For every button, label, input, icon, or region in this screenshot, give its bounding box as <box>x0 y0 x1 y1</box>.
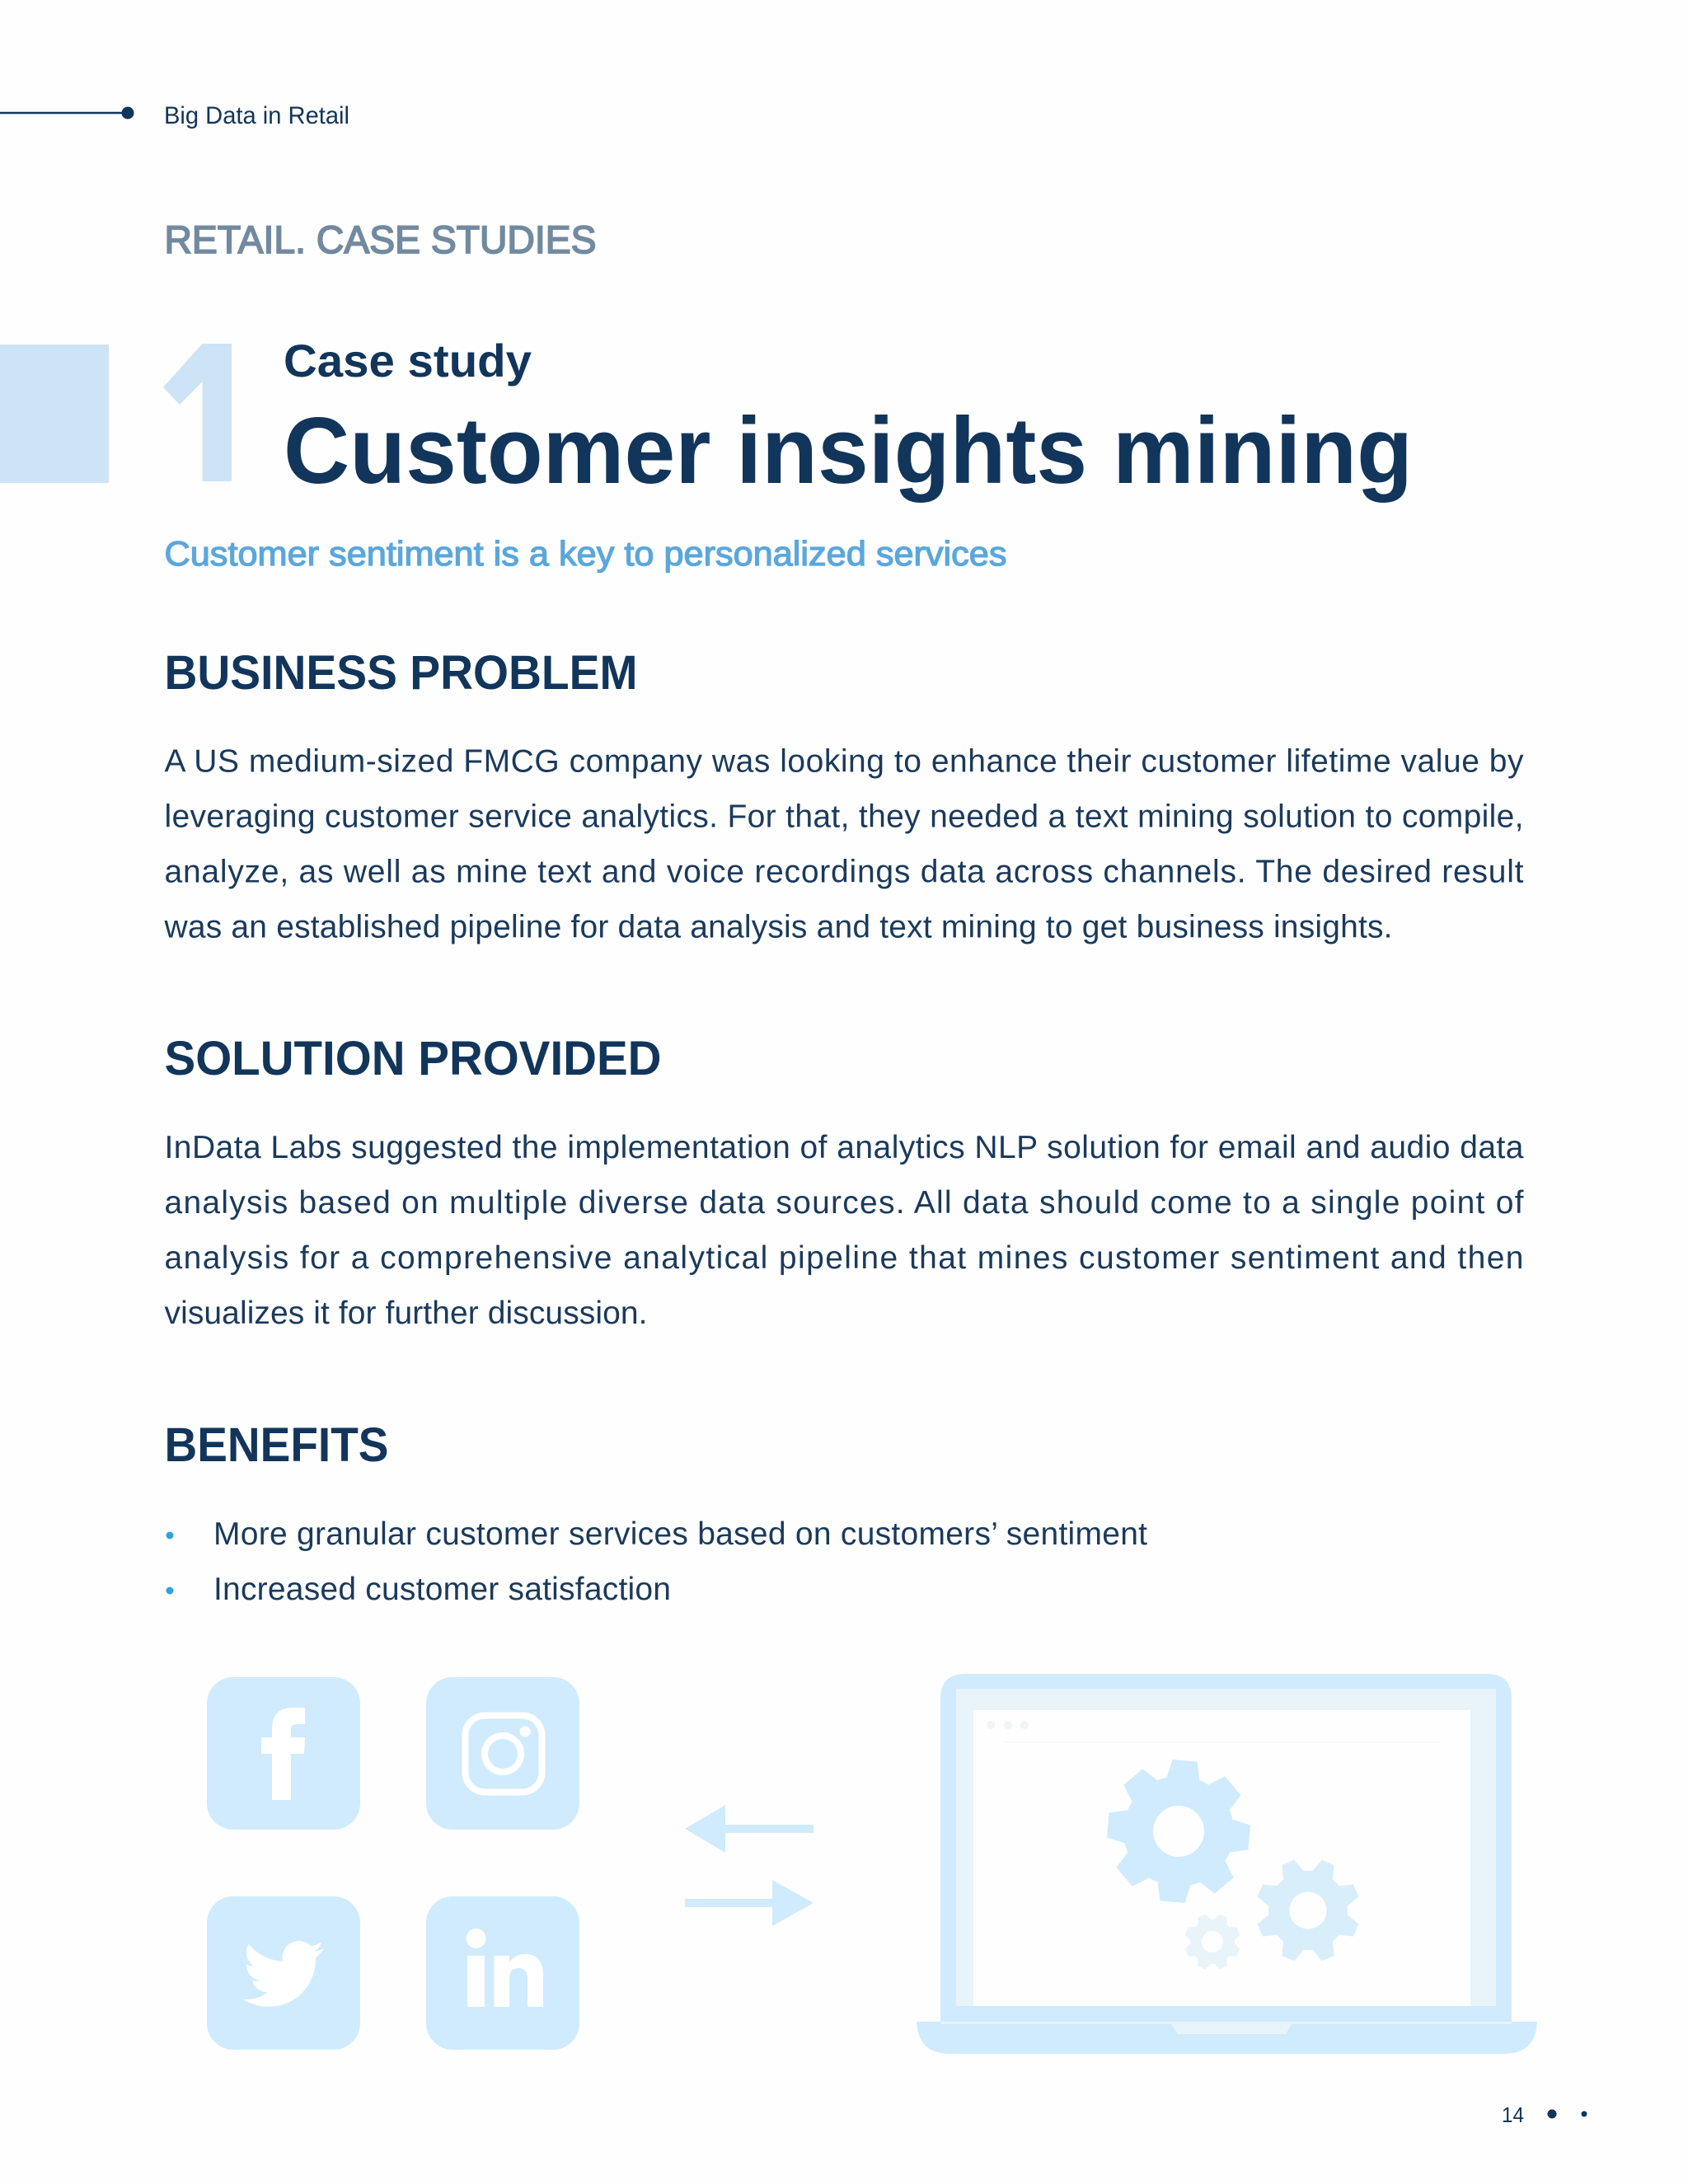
decorative square <box>0 344 109 483</box>
header: running title: Big Data in Retail <box>164 102 349 129</box>
icon: facebook <box>207 1677 360 1830</box>
text block: business problem: was an established pipeline for data analysis and text mining to get business insights. <box>163 910 1393 944</box>
benefits list: Increased customer satisfaction <box>213 1572 671 1607</box>
laptop base <box>917 2022 1537 2054</box>
icon: linkedin <box>426 1896 579 2050</box>
subtitle: Customer sentiment is a key to personalized services <box>165 534 1007 573</box>
arrow: right <box>685 1880 814 1926</box>
icon: twitter <box>207 1896 360 2050</box>
text block: business problem: leveraging customer service analytics. For that, they needed a text mining solution to compile, <box>165 799 1523 834</box>
benefits list: More granular customer services based on customers’ sentiment <box>213 1516 1147 1552</box>
gear: medium <box>1240 1843 1376 1978</box>
header: running title <box>0 102 349 129</box>
heading: benefits: BENEFITS <box>165 1418 389 1472</box>
gear: large <box>1102 1755 1255 1908</box>
text block: business problem: A US medium-sized FMCG company was looking to enhance their customer lifetime value by <box>165 743 1524 780</box>
text block: solution provided: InData Labs suggested the implementation of analytics NLP solution for email and audio data <box>165 1130 1524 1165</box>
page number: 14 <box>1502 2102 1524 2127</box>
case number: 1 <box>150 306 258 523</box>
laptop lid <box>940 1674 1512 2022</box>
main title: Customer insights mining <box>284 399 1413 504</box>
arrow: left <box>685 1805 814 1853</box>
laptop illustration <box>917 1674 1537 2054</box>
text block: solution provided: analysis for a comprehensive analytical pipeline that mines customer sentiment and then <box>165 1240 1524 1276</box>
gear: small <box>1176 1905 1249 1978</box>
text block: solution provided: visualizes it for further discussion. <box>165 1296 648 1331</box>
text block: solution provided <box>165 1130 1524 1331</box>
icon: instagram <box>426 1677 579 1830</box>
text block: solution provided: analysis based on multiple diverse data sources. All data should come to a single point of <box>165 1185 1524 1221</box>
section label: RETAIL. CASE STUDIES <box>165 218 597 261</box>
page number <box>1502 2102 1587 2127</box>
heading: solution provided: SOLUTION PROVIDED <box>165 1032 661 1085</box>
heading: business problem: BUSINESS PROBLEM <box>165 646 638 700</box>
text block: business problem <box>163 743 1524 944</box>
case study kicker: Case study <box>284 335 532 387</box>
benefits list <box>166 1516 1147 1607</box>
laptop screen <box>956 1689 1496 2006</box>
text block: business problem: analyze, as well as mine text and voice recordings data across channels. The desired result <box>165 854 1524 890</box>
